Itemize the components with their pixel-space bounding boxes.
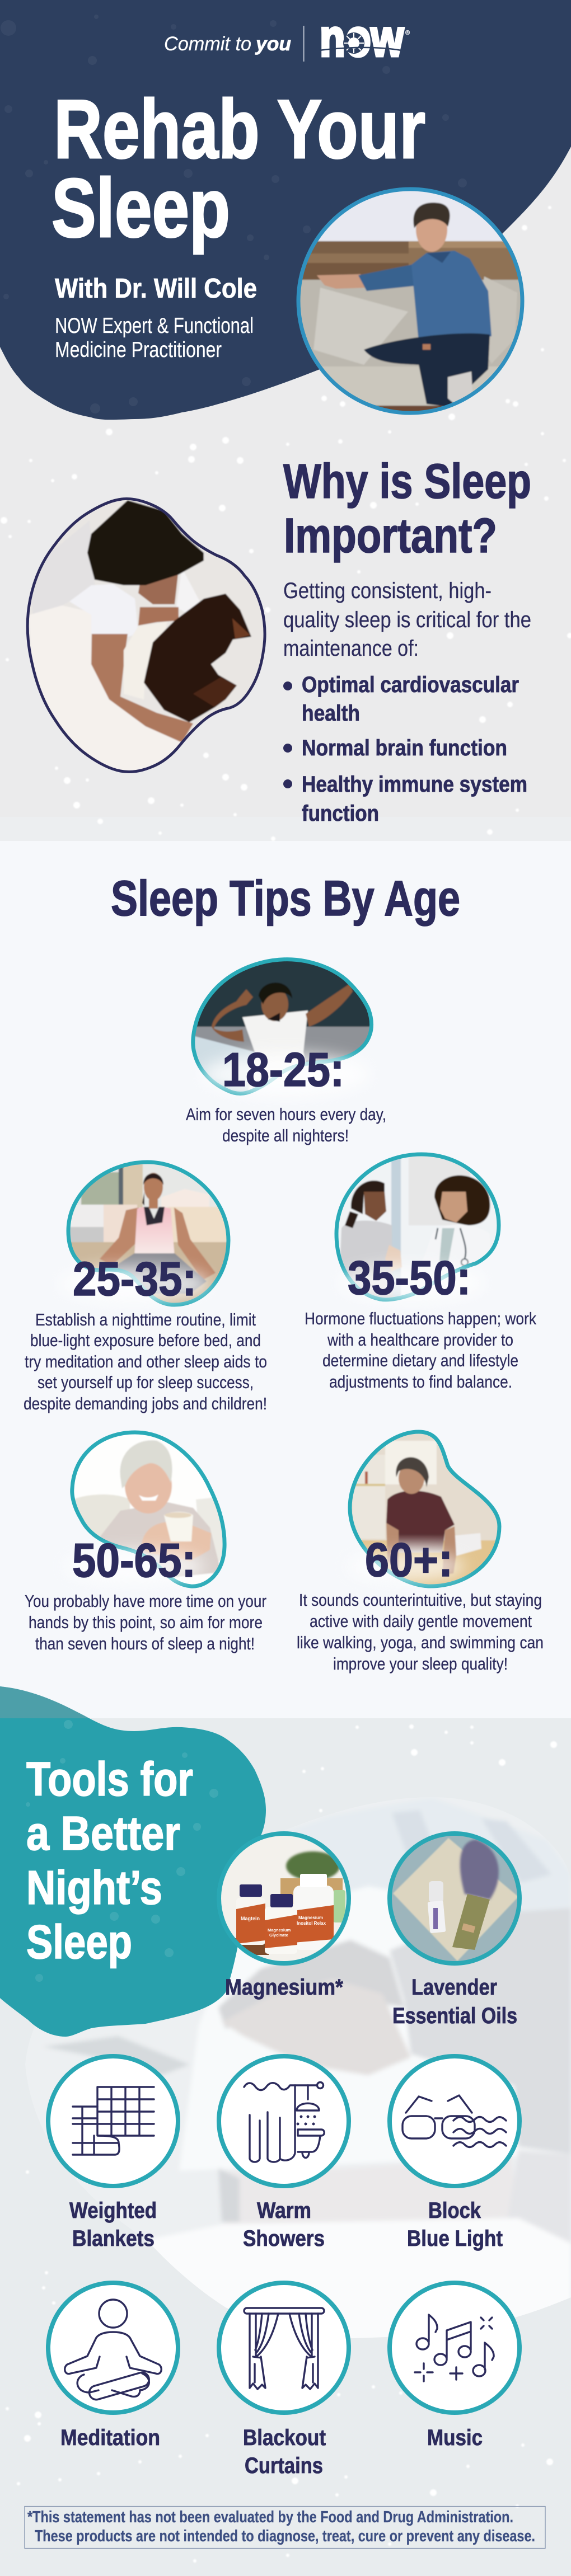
tip card: 35-50 — [305, 1150, 536, 1392]
photo: man stretching in bed — [195, 961, 369, 1092]
tip card: 50-65: hands by this point, so aim for more — [29, 1613, 263, 1632]
photo: magnesium bottles — [221, 1836, 347, 1961]
photo: Dr. Will Cole on sofa — [297, 187, 523, 417]
photo: magnesium bottles: Magnesium — [268, 1928, 291, 1933]
tip card: 25-35: try meditation and other sleep aids to — [25, 1352, 267, 1371]
bullet list — [283, 673, 527, 826]
photo: patient and doctor — [340, 1156, 492, 1298]
photo: older woman with cup — [75, 1440, 223, 1577]
logo: NOW: ® — [405, 30, 410, 36]
background photo: sleeping person on white pillow — [54, 1811, 571, 2338]
icon: blanket — [73, 2087, 154, 2155]
heading: Tools for a Better Night's Sleep: a Better — [26, 1807, 180, 1860]
tip card: 25-35: despite demanding jobs and children! — [24, 1394, 267, 1413]
tip card: 35-50: adjustments to find balance. — [329, 1372, 512, 1392]
heading: Sleep Tips By Age: Sleep Tips By Age — [111, 870, 460, 926]
title: Rehab Your — [54, 82, 425, 176]
tip card: 60+: 60+: — [365, 1534, 453, 1587]
tip card: 18-25: Aim for seven hours every day, — [186, 1104, 386, 1124]
heading: Why is Sleep Important?: Important? — [284, 509, 497, 563]
tip card: 25-35: set yourself up for sleep success, — [38, 1372, 254, 1392]
tip card: 25-35: 25-35: — [73, 1253, 196, 1306]
tool: lavender essential oils: Essential Oils — [392, 2004, 517, 2028]
tip card: 60+: active with daily gentle movement — [310, 1611, 532, 1631]
tool: music: Music — [427, 2425, 483, 2450]
bullet list: function — [302, 801, 379, 826]
intro paragraph: quality sleep is critical for the — [283, 608, 531, 632]
icon: curtains — [244, 2308, 324, 2389]
presenter title: Medicine Practitioner — [55, 338, 222, 362]
teal blob — [0, 1679, 280, 2037]
photo: magnesium bottles: Magnesium — [298, 1915, 323, 1920]
tip card: 25-35: blue-light exposure before bed, and — [30, 1331, 261, 1350]
bullet list: Normal brain function — [302, 736, 507, 760]
tip card: 50-65: You probably have more time on your — [25, 1591, 266, 1611]
tip card: 35-50: with a healthcare provider to — [327, 1330, 513, 1350]
tip card: 18-25: 18-25: — [222, 1043, 344, 1097]
photo: magnesium bottles: Inositol Relax — [297, 1921, 326, 1926]
tool: block blue light: Blue Light — [407, 2226, 503, 2251]
tip card: 35-50: Hormone fluctuations happen; work — [305, 1309, 536, 1328]
tip card: 25-35: Establish a nighttime routine, limit — [35, 1310, 256, 1329]
photo: lavender and roller bottle — [392, 1836, 517, 1961]
heading: Tools for a Better Night's Sleep: Night’s — [26, 1862, 162, 1915]
intro paragraph: Getting consistent, high- — [283, 579, 492, 603]
intro paragraph — [283, 579, 531, 661]
title: Sleep — [52, 161, 230, 255]
tool: blackout curtains — [219, 2283, 349, 2478]
heading: Tools for a Better Night's Sleep: Tools for — [26, 1753, 193, 1806]
bullet list: health — [302, 701, 360, 726]
tool: block blue light — [390, 2056, 519, 2251]
title — [52, 82, 425, 255]
icon: music notes — [415, 2315, 494, 2381]
brand line: Commit to you: you — [255, 33, 291, 55]
tip card: 18-25 — [186, 954, 386, 1145]
brand line: Commit to you: Commit to — [164, 33, 251, 55]
tool: meditation: Meditation — [60, 2425, 160, 2450]
bullet list: Optimal cardiovascular — [302, 673, 519, 697]
photo: woman meditating — [71, 1164, 226, 1303]
tip card: 25-35 — [24, 1158, 267, 1413]
photo blob: woman sleeping with dog — [22, 495, 269, 778]
tool: lavender essential oils: Lavender — [411, 1975, 497, 2000]
heading: Why is Sleep Important? — [283, 454, 531, 563]
logo: NOW: now — [320, 8, 404, 67]
tool: warm showers — [219, 2056, 349, 2251]
icon: shower and tub — [244, 2083, 324, 2162]
tool: warm showers: Warm — [257, 2198, 311, 2223]
icon: meditating figure — [65, 2300, 161, 2401]
tip card: 60+: improve your sleep quality! — [333, 1654, 508, 1674]
tip card: 18-25: despite all nighters! — [222, 1126, 349, 1145]
photo: magnesium bottles: Magtein — [241, 1916, 260, 1921]
tool: magnesium — [216, 1830, 353, 2000]
tool: weighted blankets — [48, 2056, 178, 2251]
heading: Tools for a Better Night's Sleep: Sleep — [26, 1916, 132, 1969]
disclaimer box — [25, 2507, 545, 2548]
tool: music — [390, 2283, 519, 2450]
tool: blackout curtains: Curtains — [245, 2453, 323, 2478]
brand divider — [303, 26, 305, 62]
heading: Tools for a Better Night's Sleep — [26, 1753, 193, 1969]
tool: block blue light: Block — [428, 2198, 481, 2223]
intro paragraph: maintenance of: — [283, 636, 419, 661]
icon: glasses and waves — [402, 2095, 506, 2147]
tip card: 50-65 — [25, 1430, 266, 1653]
tool: weighted blankets: Weighted — [69, 2198, 157, 2223]
tool: magnesium: Magnesium* — [225, 1975, 343, 2000]
tip card: 35-50: 35-50: — [348, 1252, 471, 1305]
tool: meditation — [48, 2283, 178, 2450]
presenter name: With Dr. Will Cole — [55, 274, 257, 304]
photo: magnesium bottles: Glycinate — [269, 1933, 288, 1938]
tool: warm showers: Showers — [243, 2226, 325, 2251]
tip card: 50-65: 50-65: — [72, 1534, 196, 1587]
tool: weighted blankets: Blankets — [72, 2226, 155, 2251]
bullet list: Healthy immune system — [302, 772, 527, 797]
header faint stars — [1, 15, 467, 413]
header navy blob — [0, 0, 571, 420]
presenter title: NOW Expert & Functional — [55, 314, 254, 338]
tool: lavender essential oils — [386, 1830, 523, 2028]
presenter title — [55, 314, 254, 362]
photo: older man stretching — [352, 1433, 497, 1585]
tip card: 50-65: than seven hours of sleep a night! — [35, 1634, 255, 1653]
tool: blackout curtains: Blackout — [243, 2425, 326, 2450]
tip card: 35-50: determine dietary and lifestyle — [322, 1351, 518, 1370]
tip card: 60+ — [297, 1430, 544, 1674]
